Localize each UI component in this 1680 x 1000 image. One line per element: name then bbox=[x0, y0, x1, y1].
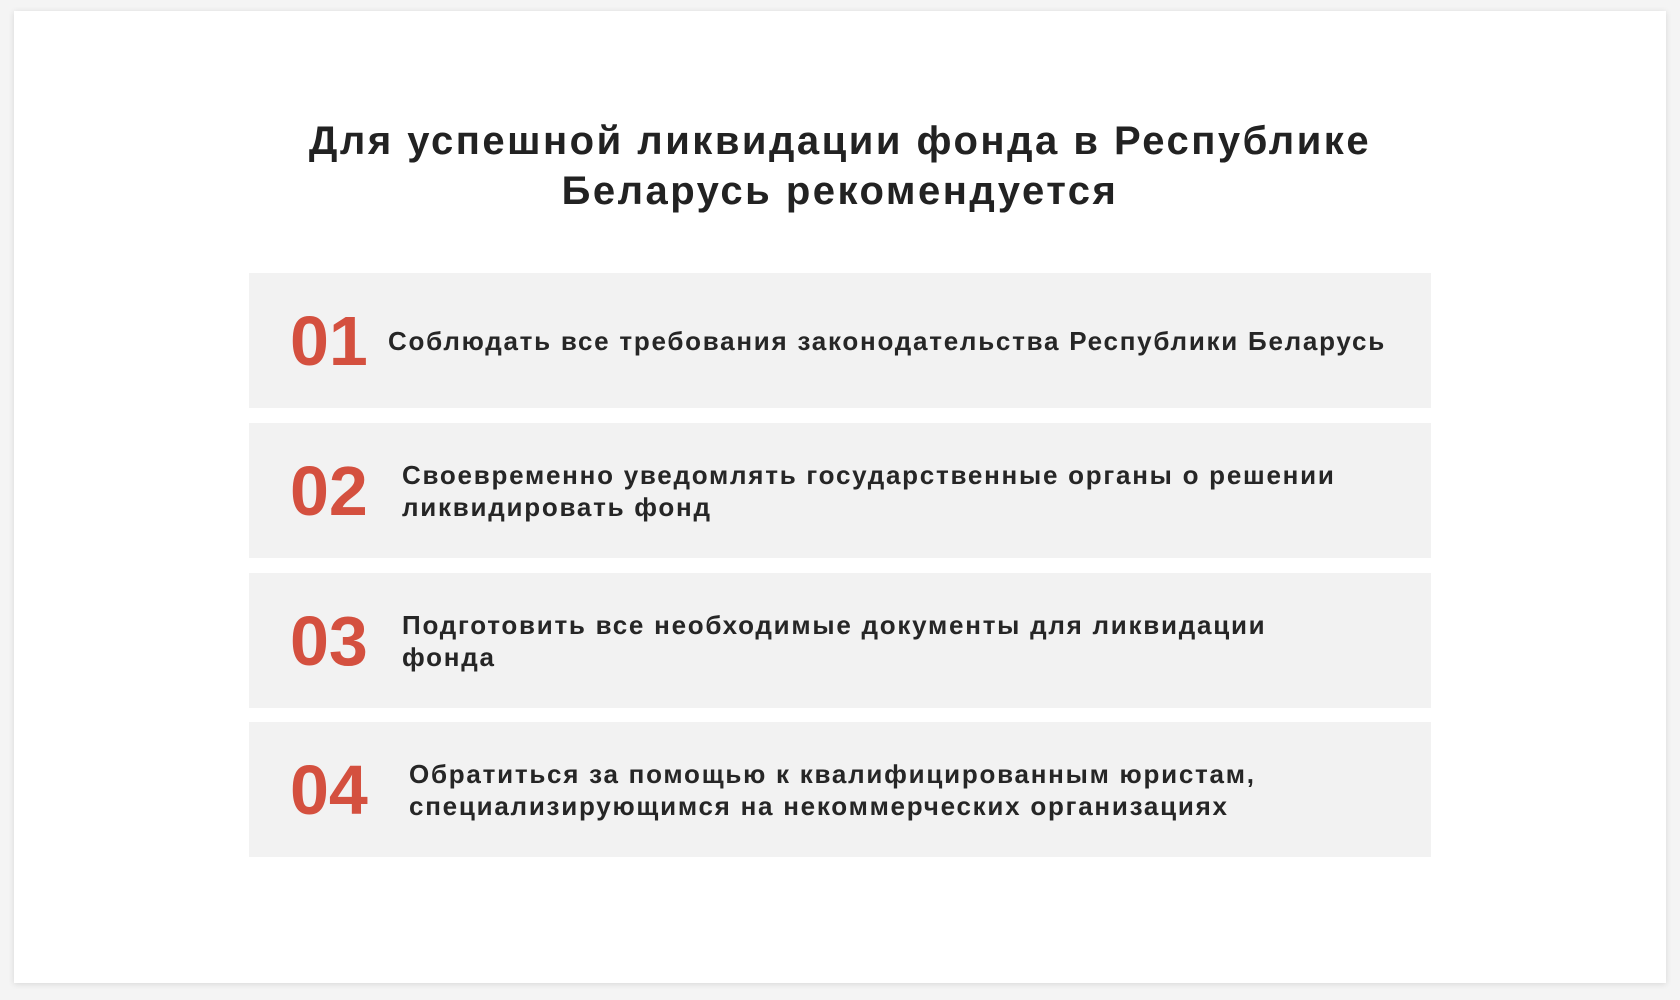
text 04 bbox=[409, 759, 1256, 821]
text 02 bbox=[402, 460, 1336, 522]
text 02: Своевременно уведомлять государственные органы о решении bbox=[402, 460, 1336, 490]
number 03: 03 bbox=[290, 602, 368, 680]
text 03 bbox=[402, 610, 1266, 672]
text 04: специализирующимся на некоммерческих организациях bbox=[409, 791, 1229, 821]
title: Беларусь рекомендуется bbox=[562, 169, 1118, 213]
text 04: Обратиться за помощью к квалифицированным юристам, bbox=[409, 759, 1256, 789]
item 01 bbox=[249, 273, 1431, 408]
item 02 bbox=[249, 423, 1431, 558]
text 02: ликвидировать фонд bbox=[402, 492, 712, 522]
text 03: фонда bbox=[402, 642, 496, 672]
item 04 bbox=[249, 722, 1431, 857]
title bbox=[309, 119, 1371, 213]
text 03: Подготовить все необходимые документы для ликвидации bbox=[402, 610, 1266, 640]
title: Для успешной ликвидации фонда в Республике bbox=[309, 119, 1371, 163]
text 01: Соблюдать все требования законодательства Республики Беларусь bbox=[388, 326, 1386, 356]
number 04: 04 bbox=[290, 751, 368, 829]
number 02: 02 bbox=[290, 452, 368, 530]
item 03 bbox=[249, 573, 1431, 708]
number 01: 01 bbox=[290, 302, 368, 380]
